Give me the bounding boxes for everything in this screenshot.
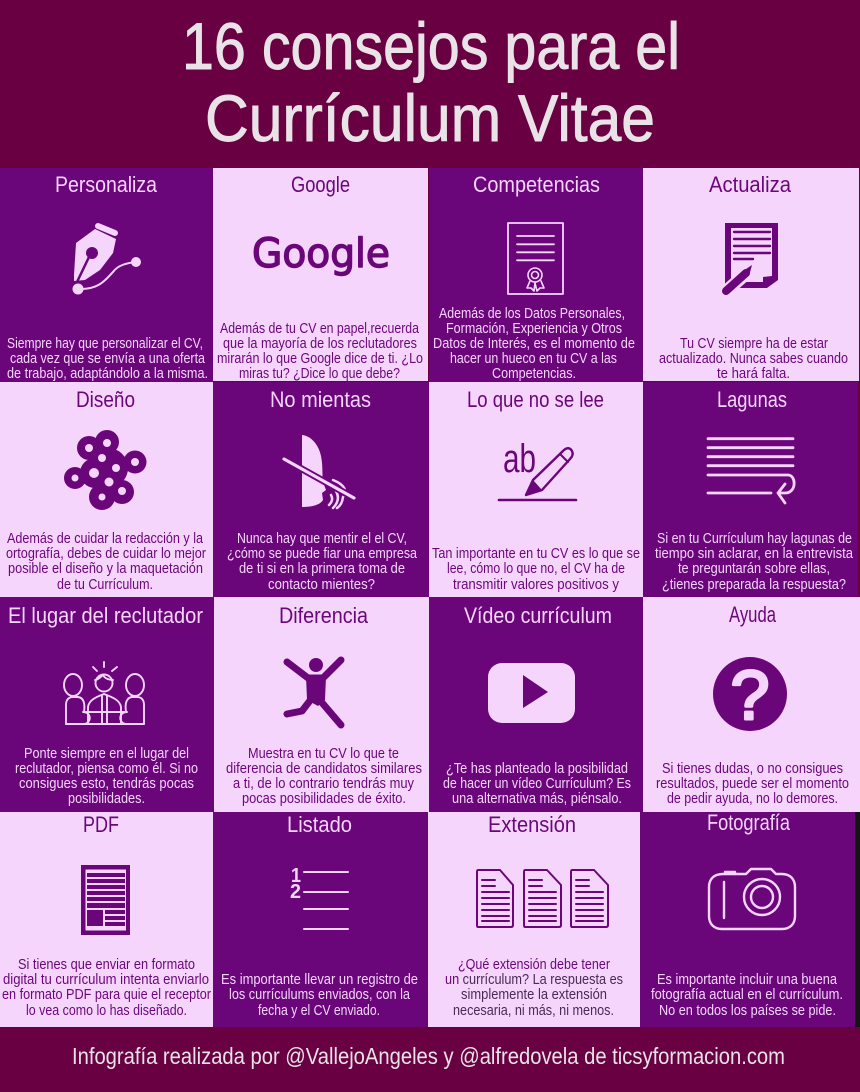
panel: Lagunas: [643, 382, 858, 597]
heading: Vídeo currículum: [464, 603, 612, 628]
icon: camera: [709, 869, 795, 929]
body text: te hará falta.: [717, 366, 790, 382]
card background: [643, 382, 858, 597]
body text: los currículums enviados, con la: [229, 987, 411, 1003]
body text: Si tienes que enviar en formato: [18, 957, 195, 973]
heading: Diferencia: [279, 603, 369, 628]
body text: miras tu? ¿Dice lo que debe?: [239, 366, 400, 382]
card background: [429, 168, 643, 382]
icon: text lines with return arrow: [708, 439, 794, 503]
panel: Competencias: [429, 168, 643, 382]
body text: fotografía actual en el currículum.: [651, 987, 843, 1003]
panel: Ayuda: [643, 597, 860, 812]
panel: No mientas: [213, 382, 429, 597]
right edge strip: [855, 812, 860, 1027]
icon: numbered list: [290, 865, 348, 929]
card background: [0, 168, 213, 382]
heading: Diseño: [76, 387, 135, 412]
body text: de hacer un vídeo Currículum? Es: [443, 776, 631, 792]
body text: cada vez que se envía a una oferta: [10, 351, 206, 367]
body text: lee, cómo lo que no, el CV ha de: [447, 561, 625, 577]
icon: numbered list: 1: [291, 865, 301, 887]
body text: [6, 531, 206, 593]
heading: Personaliza: [55, 172, 158, 197]
panel: Actualiza: [643, 168, 859, 382]
icon: play button: [488, 663, 575, 723]
icon: question mark: [713, 656, 787, 734]
icon: document layout: [81, 865, 130, 935]
body text: Nunca hay que mentir el el CV,: [237, 531, 407, 547]
icon: numbered list: 2: [290, 881, 301, 903]
body text: ¿Te has planteado la posibilidad: [446, 761, 628, 777]
body text: Siempre hay que personalizar el CV,: [7, 336, 203, 352]
body text: Datos de Interés, es el momento de: [433, 336, 635, 352]
icon: pen tool nib: [72, 226, 141, 294]
body text: [445, 957, 623, 1019]
body text: [226, 746, 422, 807]
panel: Diferencia: [214, 597, 429, 812]
body text: una alternativa más, piénsalo.: [452, 791, 622, 807]
body text: posibilidades.: [68, 791, 145, 807]
body text: Tan importante en tu CV es lo que se: [432, 546, 640, 562]
icon: knot blob: [64, 430, 146, 510]
body text: a ti, de lo contrario tendrás muy: [233, 776, 415, 792]
card background: [640, 812, 855, 1027]
panel: Diseño: [0, 382, 213, 597]
icon: jumping figure: [287, 658, 341, 725]
body text: [433, 306, 635, 382]
card background: [213, 812, 428, 1027]
body text: hacer un hueco en tu CV a las: [450, 351, 617, 367]
body text: [432, 546, 640, 593]
body text: ¿cómo se puede fiar una empresa: [227, 546, 418, 562]
icon: three people: [64, 662, 144, 724]
body text: Ponte siempre en el lugar del: [24, 746, 189, 762]
heading: Actualiza: [709, 172, 792, 197]
heading: Lagunas: [717, 387, 787, 412]
body text: contacto mientes?: [268, 577, 375, 593]
body text: transmitir valores positivos y: [453, 577, 620, 593]
body text: [221, 972, 418, 1019]
body text: ¿Qué extensión debe tener: [458, 957, 610, 973]
panel: El lugar del reclutador: [0, 597, 214, 812]
body text: [443, 761, 631, 807]
heading: No mientas: [270, 387, 371, 412]
card background: [213, 382, 429, 597]
heading: PDF: [83, 812, 119, 837]
card background: [429, 597, 643, 812]
body text: que la mayoría de los reclutadores: [223, 336, 417, 352]
body text: Muestra en tu CV lo que te: [248, 746, 399, 762]
panel: PDF: [0, 812, 213, 1027]
heading: Google: [291, 172, 350, 197]
card background: [213, 168, 428, 381]
panel: Personaliza: [0, 168, 213, 382]
panel: Extensión: [428, 812, 640, 1027]
panel: Vídeo currículum: [429, 597, 643, 812]
body text: digital tu currículum intenta enviarlo: [3, 972, 209, 988]
panel: Google: [213, 168, 428, 382]
body text: lo vea como lo has diseñado.: [26, 1003, 187, 1019]
body text: te preguntarán sobre ellas,: [678, 561, 830, 577]
body text: Formación, Experiencia y Otros: [446, 321, 622, 337]
heading: Fotografía: [707, 810, 791, 835]
card background: [643, 597, 860, 812]
body text: [655, 531, 854, 593]
body text: Además de los Datos Personales,: [439, 306, 625, 322]
panel: Fotografía: [640, 810, 855, 1027]
icon: ab and pencil: ab: [503, 437, 536, 481]
heading: Competencias: [473, 172, 600, 197]
body text: consigues esto, tendrás pocas: [19, 776, 194, 792]
body text: diferencia de candidatos similares: [226, 761, 422, 777]
card background: [0, 812, 213, 1027]
body text: Es importante llevar un registro de: [221, 972, 418, 988]
body text: [656, 761, 849, 807]
icon: three documents: [477, 870, 608, 927]
card background: [0, 597, 214, 812]
title: [182, 9, 680, 155]
card background: [428, 812, 640, 1027]
body text: mirarán lo que Google dice de ti. ¿Lo: [217, 351, 423, 367]
body text: de ti si en la primera toma de: [239, 561, 405, 577]
icon: crossed-out speaking face: [284, 435, 354, 508]
icon: question mark: ?: [731, 656, 769, 734]
body text: [7, 336, 208, 382]
card background: [214, 597, 429, 812]
body text: ortografía, debes de cuidar lo mejor: [6, 546, 206, 562]
body text: fecha y el CV enviado.: [258, 1003, 380, 1019]
body text: Competencias.: [492, 366, 576, 382]
body text: Es importante incluir una buena: [657, 972, 838, 988]
body text: Tu CV siempre ha de estar: [680, 336, 828, 352]
body text: [2, 957, 211, 1019]
body text: simplemente la extensión: [461, 987, 607, 1003]
body text: de trabajo, adaptándolo a la misma.: [7, 366, 208, 382]
footer credit: Infografía realizada por @VallejoAngeles y @alfredovela de ticsyformacion.com: [72, 1043, 785, 1069]
body text: pocas posibilidades de éxito.: [242, 791, 406, 807]
icon: Google wordmark: Google: [252, 231, 390, 277]
heading: Extensión: [488, 812, 576, 837]
body text: en formato PDF para quie el receptor: [2, 987, 211, 1003]
heading: Ayuda: [729, 602, 777, 627]
body text: Además de tu CV en papel,recuerda: [220, 321, 420, 337]
card background: [0, 382, 213, 597]
card background: [429, 382, 643, 597]
body text: [15, 746, 198, 807]
body text: [659, 336, 848, 382]
title: Currículum Vitae: [205, 81, 655, 155]
heading: Lo que no se lee: [467, 387, 604, 412]
icon: certificate: [508, 223, 563, 294]
title: 16 consejos para el: [182, 9, 680, 83]
icon: document with pencil: [722, 223, 778, 295]
icon: ab and pencil: [499, 437, 576, 500]
card background: [643, 168, 859, 381]
body text: reclutador, piensa como él. Si no: [15, 761, 198, 777]
heading: Listado: [287, 812, 352, 837]
body text: [651, 972, 843, 1019]
body text: [217, 321, 423, 382]
heading: El lugar del reclutador: [8, 603, 203, 628]
body text: posible el diseño y la maquetación: [8, 561, 203, 577]
body text: No en todos los países se pide.: [659, 1003, 836, 1019]
body text: de tu Currículum.: [57, 577, 153, 593]
body text: [227, 531, 418, 593]
body text: necesaria, ni más, ni menos.: [453, 1003, 614, 1019]
panel: Listado: [213, 812, 428, 1027]
body text: un currículum? La respuesta es: [445, 972, 623, 988]
body text: Además de cuidar la redacción y la: [7, 531, 204, 547]
panel: Lo que no se lee: [429, 382, 643, 597]
